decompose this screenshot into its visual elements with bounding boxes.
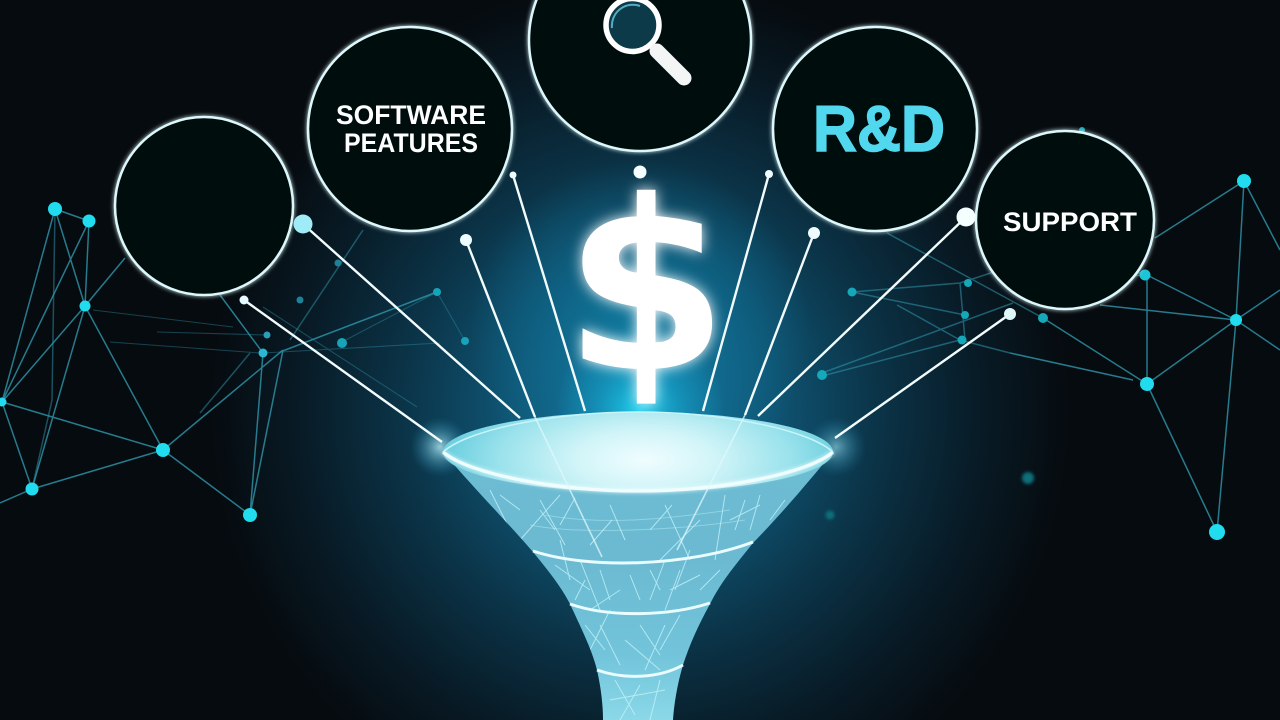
- circle: empty: [115, 117, 293, 295]
- connector lines: [244, 174, 1010, 557]
- funnel ring 2: [570, 603, 710, 614]
- dollar sign: $: [564, 150, 728, 425]
- circle: support: [976, 131, 1154, 309]
- connector dots: [240, 166, 1016, 320]
- funnel rim: [443, 412, 833, 492]
- funnel body: [454, 465, 822, 720]
- funnel ring 1: [533, 542, 753, 563]
- label: R&D: R&D: [813, 92, 945, 165]
- network: left: [0, 202, 469, 522]
- circle: search: [529, 0, 751, 151]
- label: support: SUPPORT: [1003, 207, 1138, 237]
- circle: R&D: [773, 27, 977, 231]
- circle: software features: [308, 27, 512, 231]
- network: right: [817, 127, 1280, 540]
- funnel ring 3: [597, 665, 683, 676]
- label: software: SOFTWARE: [336, 100, 486, 130]
- label: peatures: PEATURES: [344, 128, 478, 158]
- icon: magnifying glass: [606, 0, 684, 78]
- funnel: [443, 412, 833, 720]
